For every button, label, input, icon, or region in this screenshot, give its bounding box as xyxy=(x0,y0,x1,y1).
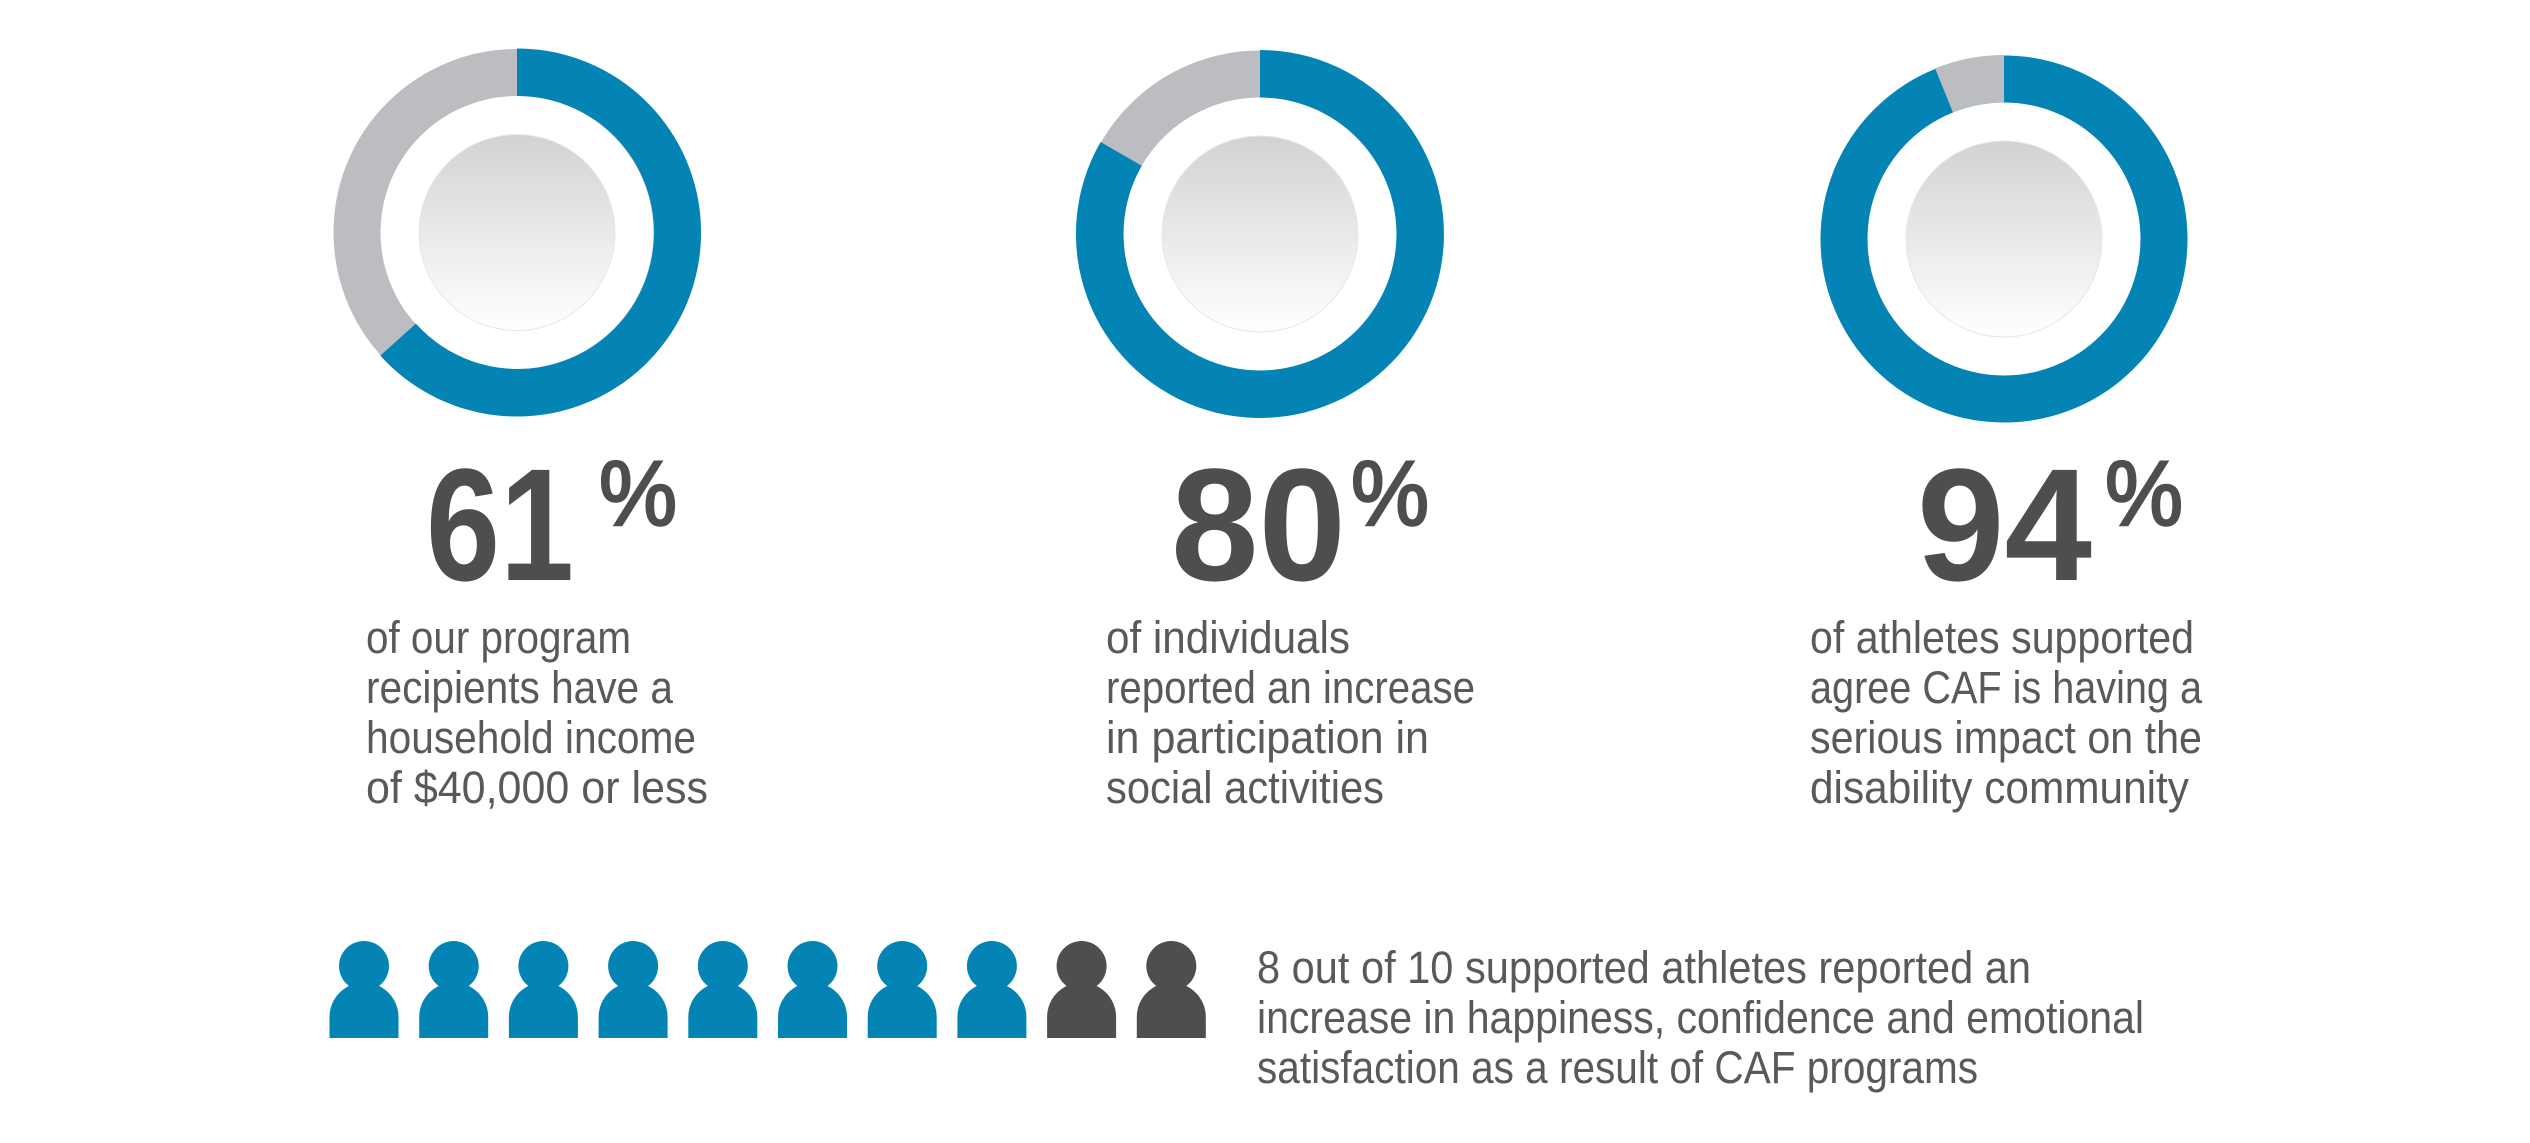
big number: 80% xyxy=(1171,435,1429,614)
text: disability community impact: of athletes supported xyxy=(1810,612,2194,663)
text: happiness and confidence statement: increase in happiness, confidence and emotional xyxy=(1257,992,2144,1043)
text: social participation: reported an increase xyxy=(1106,662,1475,713)
text: social participation xyxy=(1106,612,1475,813)
pictogram: 8 out of 10 people xyxy=(330,941,1206,1038)
text: happiness and confidence statement: satisfaction as a result of CAF programs xyxy=(1257,1042,1978,1093)
big number: 94% xyxy=(1917,435,2183,614)
big number: 61%: 61 xyxy=(426,435,574,614)
text: happiness and confidence statement xyxy=(1257,942,2144,1093)
text: program recipients income: of $40,000 or less xyxy=(366,762,708,813)
donut chart: 61 percent xyxy=(357,48,701,416)
big number: 94%: 94 xyxy=(1917,435,2092,614)
text: social participation: of individuals xyxy=(1106,612,1350,663)
text: disability community impact: disability community xyxy=(1810,762,2189,813)
big number: 94%: % xyxy=(2105,443,2183,545)
donut chart: 94 percent xyxy=(1844,55,2164,399)
panel: 94 percent statistic xyxy=(1810,55,2203,813)
text: program recipients income: recipients have a xyxy=(366,662,674,713)
text: social participation: social activities xyxy=(1106,762,1384,813)
text: happiness and confidence statement: 8 out of 10 supported athletes reported an xyxy=(1257,942,2031,993)
big number: 80%: % xyxy=(1351,443,1429,545)
text: program recipients income xyxy=(366,612,708,813)
big number: 61%: % xyxy=(599,443,677,545)
text: disability community impact: agree CAF is having a xyxy=(1810,662,2203,713)
text: disability community impact: serious impact on the xyxy=(1810,712,2202,763)
big number: 80%: 80 xyxy=(1171,435,1346,614)
panel: 80 percent statistic xyxy=(1076,50,1475,813)
text: program recipients income: of our program xyxy=(366,612,631,663)
panel: 61 percent statistic xyxy=(357,48,708,813)
text: disability community impact xyxy=(1810,612,2203,813)
text: program recipients income: household income xyxy=(366,712,696,763)
text: social participation: in participation in xyxy=(1106,712,1429,763)
donut chart: 80 percent xyxy=(1076,50,1444,418)
